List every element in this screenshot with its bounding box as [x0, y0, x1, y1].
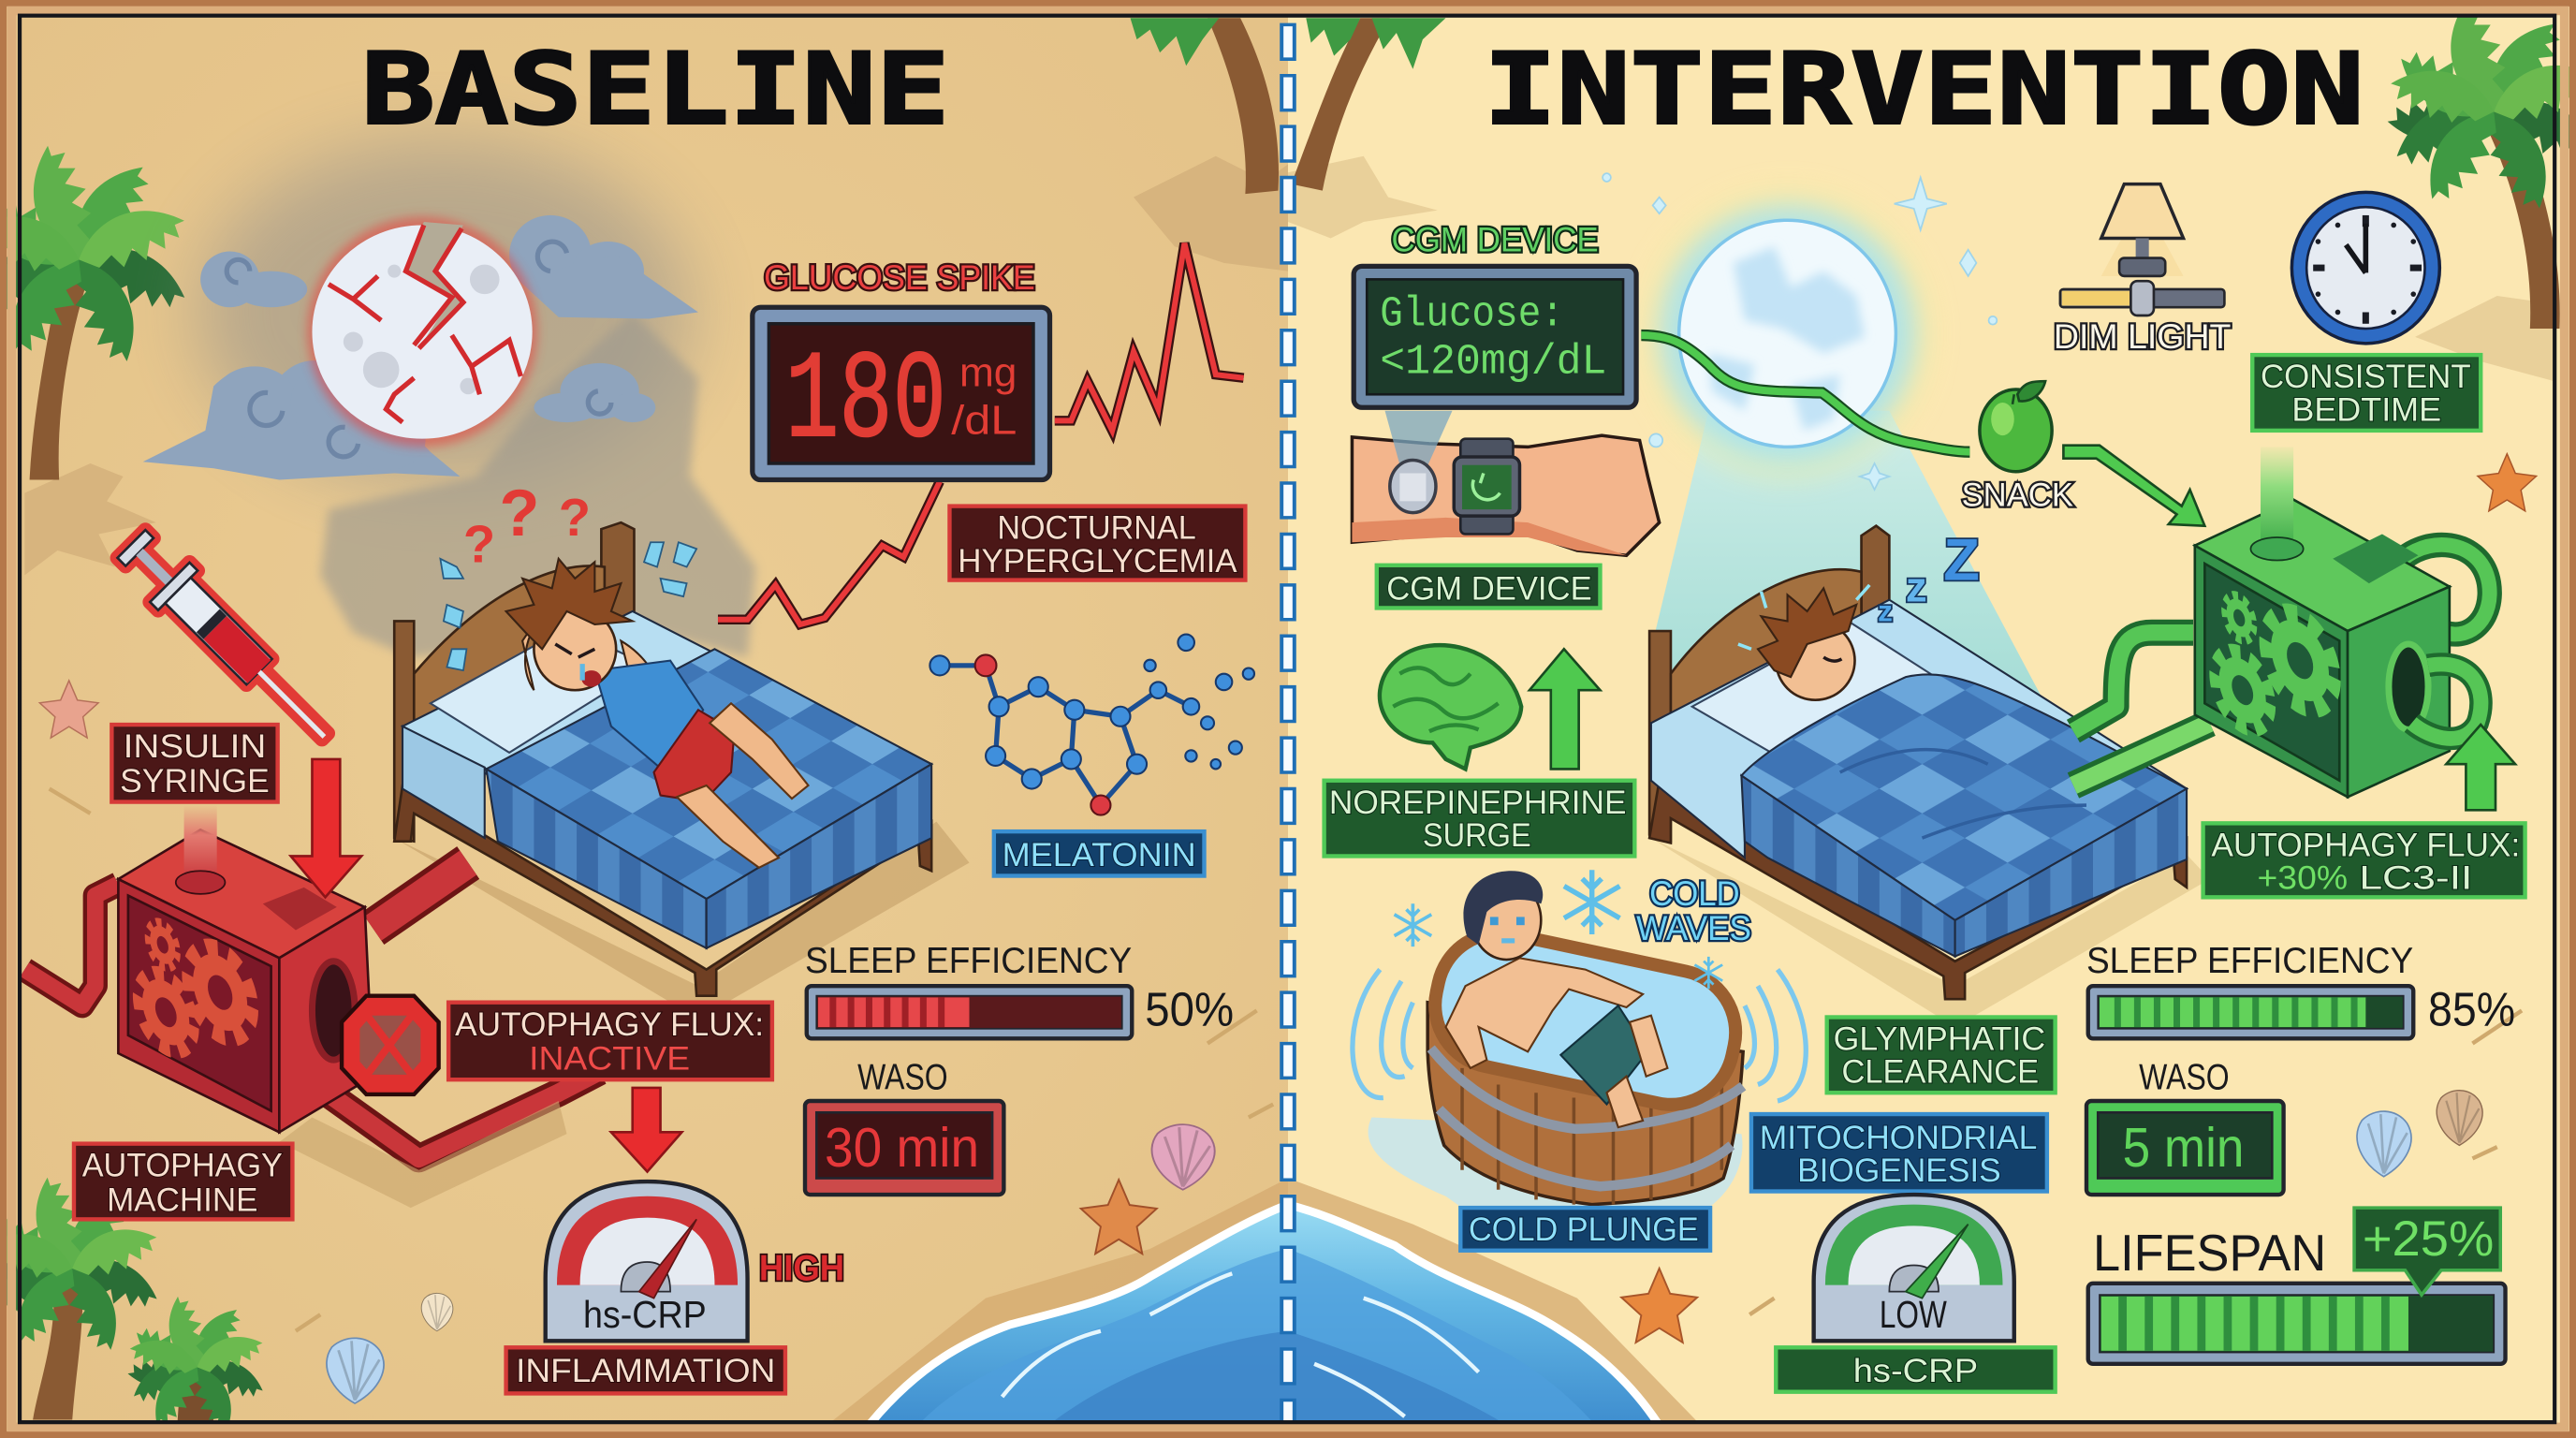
metric: sleep efficiency intervention	[2086, 941, 2515, 1038]
metric: WASO intervention: WASO	[2139, 1058, 2230, 1098]
tub rim with water	[1424, 921, 1748, 1116]
arrow: autophagy up	[2446, 725, 2515, 810]
arrow: norepinephrine up	[1530, 649, 1600, 769]
blanket	[487, 649, 931, 948]
palm trees: centre top	[1131, 18, 1445, 194]
label: nocturnal hyperglycemia: NOCTURNAL	[997, 510, 1196, 547]
label: nocturnal hyperglycemia: HYPERGLYCEMIA	[958, 543, 1237, 580]
question marks: ?	[463, 514, 495, 573]
label: hs-CRP low: hs-CRP	[1853, 1353, 1978, 1389]
label: autophagy machine	[74, 1144, 292, 1219]
label: autophagy machine: MACHINE	[107, 1182, 258, 1219]
label: mitochondrial biogenesis: BIOGENESIS	[1797, 1152, 2001, 1189]
label: autophagy flux +30%: AUTOPHAGY FLUX:	[2211, 827, 2520, 863]
label: norepinephrine surge	[1325, 781, 1634, 856]
grey smoke cloud behind moon	[198, 139, 755, 657]
text: INTERVENTION title: INTERVENTION	[1484, 32, 2364, 147]
label: mitochondrial biogenesis: MITOCHONDRIAL	[1760, 1120, 2037, 1156]
label: autophagy flux inactive: INACTIVE	[529, 1041, 690, 1078]
sweat drops	[440, 542, 696, 670]
zzz: Z	[1943, 528, 1980, 594]
label: norepinephrine surge: NOREPINEPHRINE	[1329, 785, 1627, 821]
smartwatch	[1460, 439, 1513, 534]
label: nocturnal hyperglycemia	[949, 506, 1245, 580]
top tube	[184, 805, 217, 881]
restless sleeper	[506, 559, 809, 868]
label: autophagy flux +30%: +30%	[2258, 860, 2348, 897]
label: inflammation: INFLAMMATION	[516, 1353, 775, 1389]
icon: intervention bed with sleeper	[1649, 526, 2187, 999]
metric: WASO intervention	[2086, 1058, 2284, 1195]
beach decor right	[1621, 454, 2537, 1343]
icon: wrist with CGM and watch	[1352, 411, 1660, 555]
label: glymphatic clearance: CLEARANCE	[1841, 1054, 2039, 1091]
glucose monitor 180 mg/dL: mg	[959, 349, 1017, 395]
question marks	[463, 476, 591, 573]
glucose monitor: under 120 mg/dL	[1354, 266, 1636, 407]
beach decor left	[39, 681, 1215, 1403]
top tube	[2261, 447, 2293, 546]
glucose monitor 180 mg/dL	[753, 307, 1050, 480]
palm tree: left upper	[0, 146, 193, 480]
label: autophagy flux +30%	[2203, 823, 2525, 897]
zzz	[1878, 528, 1980, 627]
icon: cracked moon	[307, 217, 537, 447]
ocean shoreline	[829, 1178, 1699, 1423]
machine shadow	[279, 1101, 567, 1208]
mattress	[1651, 600, 2187, 920]
bed shadow intervention	[1651, 838, 2210, 1027]
sparkles	[1603, 173, 1997, 490]
arrow: insulin down to machine	[291, 759, 361, 897]
centre divider dashed line	[1283, 23, 1293, 1423]
bed frame and posts	[394, 522, 931, 996]
label: consistent bedtime: BEDTIME	[2291, 391, 2441, 428]
glucose monitor 180 mg/dL: /dL	[951, 397, 1017, 443]
glucose chart line: baseline	[718, 243, 1244, 624]
label: norepinephrine surge: SURGE	[1423, 817, 1531, 854]
label: autophagy flux inactive: AUTOPHAGY FLUX:	[455, 1006, 764, 1043]
zzz: z	[1878, 594, 1893, 627]
autophagy machine: baseline	[24, 805, 600, 1208]
metric: WASO intervention: 5 min	[2123, 1116, 2244, 1179]
label: cold waves: WAVES	[1636, 909, 1751, 947]
icon: baseline bed with restless sleeper	[394, 476, 931, 996]
pipes	[2073, 545, 2490, 785]
sleeper head	[1738, 585, 1869, 700]
label: insulin syringe: SYRINGE	[120, 763, 270, 800]
centre divider inner highlight	[1285, 26, 1291, 1423]
palm tree: right upper	[2385, 4, 2576, 329]
autophagy machine: intervention	[2073, 447, 2490, 797]
arrow: flux down to inflammation	[611, 1088, 681, 1171]
label: autophagy flux +30%: LC3-II	[2359, 860, 2472, 897]
label: glymphatic clearance	[1827, 1017, 2056, 1093]
bed frame and headboard	[1649, 526, 2187, 999]
pillow	[431, 627, 649, 753]
storm clouds	[143, 215, 698, 480]
text: glucose spike heading: GLUCOSE SPIKE	[764, 258, 1035, 297]
icon: melatonin molecule	[929, 635, 1254, 815]
metric: sleep efficiency baseline: SLEEP EFFICIENCY	[805, 941, 1132, 981]
icon: insulin syringe	[111, 524, 344, 756]
text: cgm device heading: CGM DEVICE	[1392, 221, 1599, 259]
label: cold waves: COLD	[1649, 874, 1740, 913]
icon: cold plunge tub	[1368, 871, 1748, 1208]
blanket	[1741, 674, 2187, 957]
palm shadows on the sand	[24, 156, 2554, 575]
question marks: ?	[559, 488, 591, 547]
gauge: hs-CRP low	[1814, 1195, 2014, 1341]
metric: sleep efficiency baseline	[805, 941, 1234, 1038]
label: autophagy machine: AUTOPHAGY	[82, 1148, 283, 1184]
icon: stop octagon X	[342, 996, 439, 1094]
label: mitochondrial biogenesis	[1751, 1114, 2047, 1192]
arrow: snack to autophagy machine	[2063, 446, 2204, 526]
cold waves and snowflakes	[1353, 873, 1806, 1101]
icon: green apple snack	[1980, 381, 2052, 472]
label: snack: SNACK	[1962, 477, 2074, 514]
green glucose curve	[1641, 335, 1969, 452]
pipes	[24, 862, 600, 1158]
icon: dim lamp	[2101, 184, 2184, 276]
label: consistent bedtime: CONSISTENT	[2261, 359, 2471, 395]
gauge: hs-CRP low: LOW	[1880, 1293, 1947, 1336]
badge: +25% lifespan: +25%	[2363, 1211, 2494, 1267]
label: autophagy flux inactive	[448, 1003, 772, 1079]
label: hs-CRP low	[1776, 1347, 2056, 1392]
label: cgm device: CGM DEVICE	[1386, 571, 1592, 608]
question marks: ?	[500, 476, 539, 550]
moon light beam	[1651, 411, 2052, 772]
icon: wall clock	[2291, 192, 2439, 344]
label: insulin syringe: INSULIN	[124, 728, 266, 765]
metric: lifespan bar: LIFESPAN	[2093, 1225, 2326, 1282]
zzz: z	[1906, 563, 1927, 610]
label: inflammation	[506, 1347, 785, 1393]
metric: sleep efficiency baseline: 50%	[1145, 982, 1234, 1035]
glucose monitor: under 120 mg/dL: <120mg/dL	[1380, 337, 1606, 386]
metric: WASO baseline: 30 min	[825, 1116, 979, 1179]
glucose monitor 180 mg/dL: 180	[785, 332, 946, 474]
metric: WASO baseline	[805, 1058, 1003, 1195]
metric: sleep efficiency intervention: 85%	[2428, 982, 2515, 1035]
box faces	[2195, 500, 2450, 797]
tub body	[1427, 1003, 1743, 1205]
metric: WASO baseline: WASO	[857, 1058, 948, 1098]
gauge: hs-CRP high: hs-CRP	[583, 1293, 707, 1336]
cgm sensor beam	[1385, 411, 1453, 477]
label: insulin syringe	[111, 725, 278, 802]
label: cold waves	[1636, 874, 1751, 947]
label: cold plunge: COLD PLUNGE	[1469, 1211, 1699, 1248]
text: HIGH indicator: HIGH	[759, 1248, 844, 1288]
metric: sleep efficiency intervention: SLEEP EFFICIENCY	[2086, 941, 2413, 981]
badge: +25% lifespan	[2354, 1208, 2500, 1295]
box faces	[118, 829, 373, 1132]
gauge: hs-CRP high	[546, 1181, 748, 1341]
icon: glowing full moon	[1643, 189, 1932, 478]
water puddle	[1368, 1118, 1742, 1208]
palm trees: bottom left	[0, 1178, 268, 1434]
bed shadow baseline	[394, 822, 970, 1019]
label: melatonin: MELATONIN	[1003, 837, 1196, 873]
label: dim light: DIM LIGHT	[2054, 317, 2231, 356]
label: consistent bedtime	[2252, 355, 2481, 431]
icon: dim slider	[2060, 281, 2224, 315]
label: glymphatic clearance: GLYMPHATIC	[1834, 1021, 2045, 1058]
bather	[1445, 871, 1667, 1127]
glucose monitor: under 120 mg/dL: Glucose:	[1380, 290, 1564, 339]
text: BASELINE title: BASELINE	[361, 32, 949, 147]
pillow	[1692, 621, 1930, 759]
mattress and sheet	[402, 611, 931, 899]
metric: lifespan bar	[2088, 1225, 2506, 1364]
brain icon	[1380, 645, 1521, 769]
